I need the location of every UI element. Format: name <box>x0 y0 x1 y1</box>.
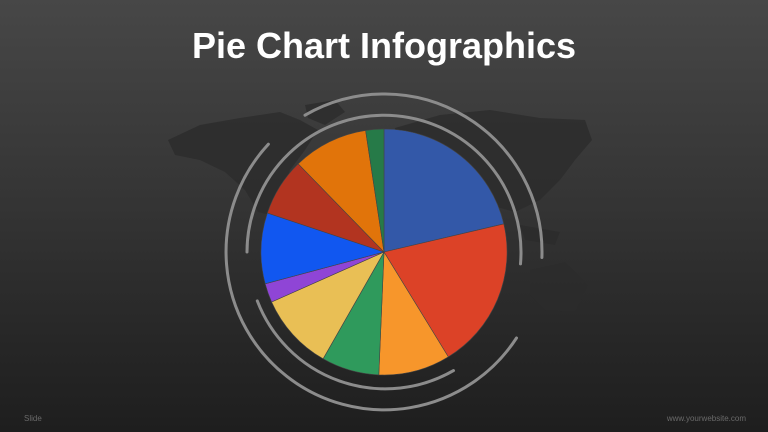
decorative rings <box>226 94 542 410</box>
footer right: www.yourwebsite.com <box>667 414 746 423</box>
pie slices <box>261 129 507 375</box>
title: Pie Chart Infographics <box>192 25 576 66</box>
footer left: Slide <box>24 414 42 423</box>
